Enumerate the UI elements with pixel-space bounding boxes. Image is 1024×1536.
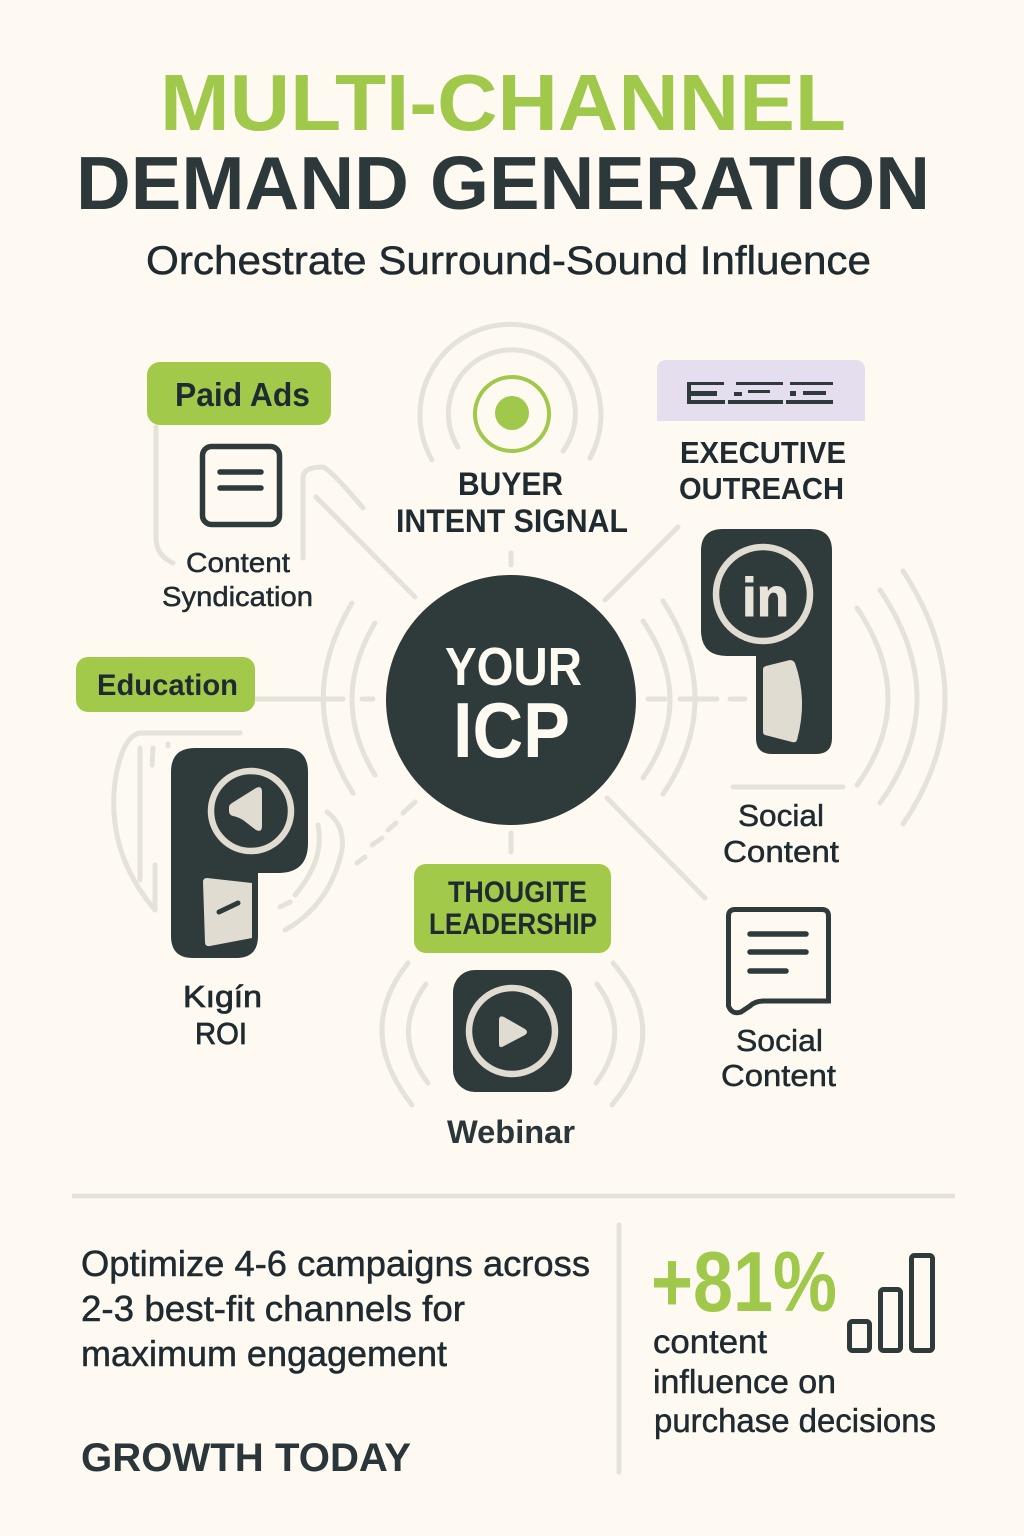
- icon: linkedin card: [701, 529, 832, 754]
- label: executive outreach: [679, 435, 846, 506]
- central circle: your ICP: ICP: [453, 686, 570, 774]
- brand: growth today: GROWTH TODAY: [81, 1436, 411, 1480]
- text block: campaign recommendation: [81, 1243, 590, 1374]
- icon: chat bubble: [728, 910, 828, 1013]
- tag: paid ads: Paid Ads: [175, 376, 310, 413]
- text block: campaign recommendation: maximum engagement: [81, 1333, 447, 1374]
- label: social content (lower): Social: [736, 1023, 823, 1058]
- connector lines and sound waves: [114, 324, 945, 1105]
- icon: webinar play card: [453, 970, 572, 1092]
- label: social content (lower): Content: [721, 1058, 836, 1093]
- label: content syndication: Content: [186, 547, 290, 578]
- label: garbled high ROI: ROI: [195, 1016, 247, 1051]
- icon: document: [202, 446, 280, 524]
- stat description: influence on: [653, 1363, 836, 1400]
- tag: thought leadership: THOUGITE: [448, 876, 587, 909]
- label: garbled high ROI: Kıgín: [183, 979, 262, 1014]
- label: buyer intent signal: BUYER: [458, 466, 563, 502]
- label: executive outreach: EXECUTIVE: [680, 435, 846, 470]
- icon: linkedin card: in: [742, 566, 789, 628]
- icon: megaphone card: [171, 748, 308, 958]
- tag: thought leadership: LEADERSHIP: [429, 908, 597, 941]
- tag: thought leadership: [414, 864, 611, 953]
- title: DEMAND GENERATION: [76, 141, 930, 225]
- label: webinar: Webinar: [447, 1114, 575, 1150]
- stat description: purchase decisions: [654, 1402, 936, 1439]
- stat description: content: [653, 1323, 767, 1360]
- stat description: [653, 1323, 936, 1439]
- label: social content (upper): Social: [738, 798, 824, 833]
- tag: education: [76, 657, 255, 712]
- tag: paid ads: [147, 362, 331, 425]
- icon: bar chart: [850, 1256, 932, 1350]
- label: social content (upper): [723, 798, 839, 869]
- label: social content (lower): [721, 1023, 836, 1093]
- label: buyer intent signal: [396, 466, 628, 539]
- tag: education: Education: [97, 669, 238, 702]
- label: garbled high ROI: [183, 979, 262, 1051]
- subtitle: Orchestrate Surround-Sound Influence: [146, 239, 871, 283]
- text block: campaign recommendation: Optimize 4-6 campaigns across: [81, 1243, 590, 1284]
- label: content syndication: [162, 547, 313, 612]
- icon: buyer intent signal target: [475, 377, 549, 451]
- central circle: your ICP: YOUR: [445, 637, 582, 697]
- stat: +81%: +81%: [651, 1235, 837, 1330]
- label: buyer intent signal: INTENT SIGNAL: [396, 503, 628, 539]
- title: MULTI-CHANNEL: [160, 58, 846, 147]
- tag: lavender garbled label: [657, 360, 865, 421]
- title: [76, 58, 930, 225]
- label: social content (upper): Content: [723, 834, 839, 869]
- label: content syndication: Syndication: [162, 581, 313, 612]
- text block: campaign recommendation: 2-3 best-fit channels for: [81, 1288, 465, 1329]
- central circle: your ICP: [386, 575, 636, 825]
- label: executive outreach: OUTREACH: [679, 471, 844, 506]
